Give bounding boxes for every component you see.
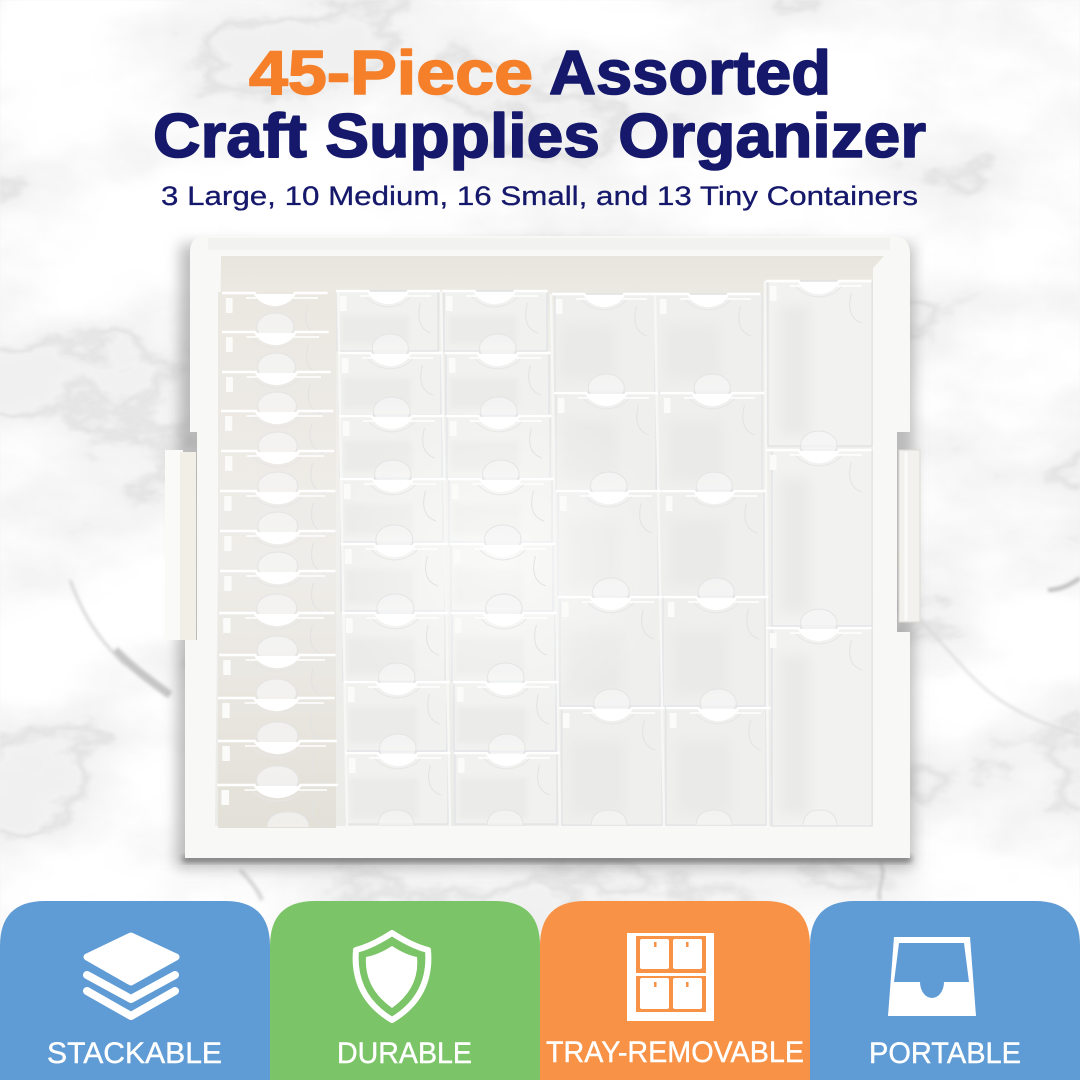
icon: inbox tray <box>888 937 976 1016</box>
medium container lids <box>552 294 770 825</box>
label: portable: PORTABLE <box>869 1037 1021 1070</box>
container glare <box>330 400 670 720</box>
medium and large container inner shading <box>560 305 810 815</box>
left handle <box>165 450 196 640</box>
title: Assorted <box>549 39 831 108</box>
label: tray-removable: TRAY-REMOVABLE <box>546 1036 804 1069</box>
panel: durable <box>270 901 540 1080</box>
tray shadow <box>176 244 914 868</box>
label: durable: DURABLE <box>337 1037 472 1070</box>
title: 45-Piece <box>249 39 533 108</box>
icon: tray with containers <box>627 933 714 1021</box>
large container lids <box>766 281 872 825</box>
right handle <box>899 450 920 622</box>
tiny container lids <box>217 293 338 827</box>
tray outer frame <box>185 236 910 858</box>
small container lids <box>336 291 560 825</box>
icon: stacked layers <box>87 936 176 1016</box>
label: stackable: STACKABLE <box>47 1037 222 1070</box>
icon: shield <box>356 933 428 1020</box>
panel: stackable <box>0 901 270 1080</box>
medium containers <box>555 294 766 825</box>
tray interior <box>215 256 884 826</box>
large containers <box>768 281 872 826</box>
panel: portable <box>810 901 1080 1080</box>
title <box>153 39 926 171</box>
inner walls <box>338 281 768 826</box>
subtitle: 3 Large, 10 Medium, 16 Small, and 13 Tiny Containers <box>161 181 918 211</box>
small container inner shading <box>341 316 527 818</box>
title: Craft Supplies Organizer <box>153 102 926 171</box>
small containers <box>337 291 557 824</box>
organizer tray photo <box>165 236 920 868</box>
panel: tray-removable <box>540 901 810 1080</box>
